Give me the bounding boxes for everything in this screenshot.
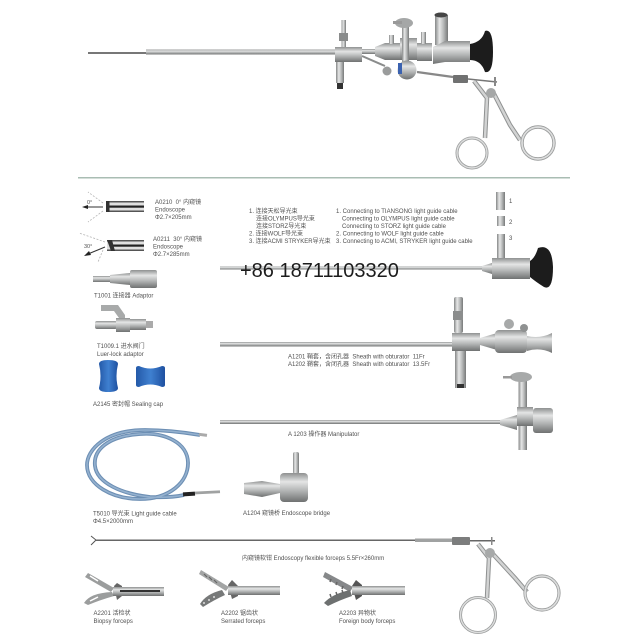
connection notes: English: 3. Connecting to ACMI, STRYKER light guide cable bbox=[336, 239, 473, 245]
icon: serrated jaws bbox=[199, 570, 280, 607]
label: A1204: A1204 窥镜桥 Endoscope bridge bbox=[243, 509, 331, 517]
icon: coiled blue cable bbox=[87, 430, 220, 499]
item: A0211 30 degree endoscope bbox=[79, 233, 202, 262]
icon: biopsy jaws bbox=[84, 573, 164, 605]
item: A1204 endoscope bridge bbox=[243, 452, 331, 517]
label: A0211: Endoscope bbox=[153, 244, 184, 250]
icon: bridge bbox=[244, 452, 308, 502]
label: A0211: Φ2.7×285mm bbox=[153, 252, 190, 258]
label: T5010: Φ4.5×2000mm bbox=[93, 519, 133, 525]
item: endoscope with adapters bbox=[220, 192, 553, 288]
item: flexible forceps bbox=[91, 536, 559, 632]
label: A0211: A0211 30° 内窥镜 bbox=[153, 237, 202, 243]
label: A2145: A2145 密封帽 Sealing cap bbox=[93, 400, 164, 408]
item: A2203 foreign body forceps bbox=[323, 572, 405, 625]
connection notes: Chinese: 2. 连接WOLF导光束 bbox=[249, 230, 303, 238]
divider line bbox=[78, 177, 570, 178]
label: A2203: A2203 异物状 bbox=[339, 611, 376, 617]
icon: 0 degree scope tip bbox=[82, 192, 144, 222]
icon: foreign body jaws bbox=[323, 572, 405, 606]
main instrument: assembled endoscope with forceps bbox=[88, 12, 554, 168]
icon: telescope bbox=[220, 234, 553, 288]
connection notes: Chinese: 3. 连接ACMI STRYKER导光束 bbox=[249, 237, 331, 245]
item: sheath with obturator bbox=[220, 297, 552, 388]
label: A0210: Φ2.7×205mm bbox=[155, 215, 192, 221]
item: manipulator bbox=[220, 372, 553, 450]
connection notes: Chinese: 连接OLYMPUS导光束 bbox=[256, 214, 315, 222]
icon: 30 degree scope tip bbox=[79, 233, 144, 262]
adapter numbers: 2 bbox=[509, 220, 513, 226]
label: A2202: A2202 锯齿状 bbox=[221, 611, 258, 617]
icon: adapter 2 bbox=[497, 216, 505, 226]
item: T5010 light guide cable bbox=[87, 430, 220, 525]
label: T1009.1: Luer-lock adaptor bbox=[97, 352, 144, 358]
icon: forceps bbox=[91, 536, 559, 632]
label: A1201 / A1202: A1202 鞘套，含闭孔器 Sheath with obturator 13.5Fr bbox=[288, 360, 430, 368]
item: A2145 sealing caps bbox=[93, 360, 165, 408]
icon: blue sealing caps bbox=[99, 360, 165, 392]
label: A2203: Foreign body forceps bbox=[339, 619, 395, 625]
label: A1203: A 1203 操作器 Manipulator bbox=[288, 430, 359, 438]
icon: adapter 1 bbox=[496, 192, 505, 210]
label: T1009.1: T1009.1 进水阀门 bbox=[97, 344, 145, 350]
label: A2201: A2201 活检状 bbox=[94, 611, 131, 617]
item: A2202 serrated forceps bbox=[199, 570, 280, 625]
connection notes: English: Connecting to OLYMPUS light guide cable bbox=[342, 216, 455, 222]
item: A0210 0 degree endoscope: 0° bbox=[87, 200, 92, 206]
connection notes: English: 1. Connecting to TIANSONG light guide cable bbox=[336, 209, 458, 215]
item: A2201 biopsy forceps bbox=[84, 573, 164, 625]
label: A0210: A0210 0° 内窥镜 bbox=[155, 200, 201, 206]
icon: manipulator bbox=[220, 372, 553, 450]
item: A0211 30 degree endoscope: 30° bbox=[84, 244, 92, 250]
label: A2202: Serrated forceps bbox=[221, 619, 265, 625]
adapter numbers: 3 bbox=[509, 236, 513, 242]
label: A2201: Biopsy forceps bbox=[94, 619, 133, 625]
connection notes: Chinese: 连接STORZ导光束 bbox=[256, 222, 306, 230]
label: T5010: T5010 导光束 Light guide cable bbox=[93, 512, 177, 518]
connection notes: Chinese: 1. 连接天松导光束 bbox=[249, 209, 298, 215]
label: T1001: T1001 连接器 Adaptor bbox=[94, 292, 153, 300]
item: A0210 0 degree endoscope bbox=[82, 192, 201, 222]
adapter numbers: 1 bbox=[509, 199, 512, 205]
label: flexible forceps: 内窥镜软钳 Endoscopy flexible forceps 5.5Fr×260mm bbox=[242, 554, 384, 562]
icon: luer-lock adaptor bbox=[95, 305, 153, 332]
label: A1201 / A1202: A1201 鞘套，含闭孔器 Sheath with obturator 11Fr bbox=[288, 354, 425, 360]
connection notes: English: Connecting to STORZ light guide cable bbox=[342, 224, 447, 230]
item: T1009.1 luer-lock adaptor bbox=[95, 305, 153, 358]
connection notes: English: 2. Connecting to WOLF light guide cable bbox=[336, 232, 444, 238]
item: T1001 adaptor bbox=[93, 270, 157, 300]
icon: adaptor bbox=[93, 270, 157, 288]
icon: sheath bbox=[220, 297, 552, 388]
phone number: +86 18711103320 bbox=[240, 260, 399, 282]
label: A0210: Endoscope bbox=[155, 208, 186, 214]
